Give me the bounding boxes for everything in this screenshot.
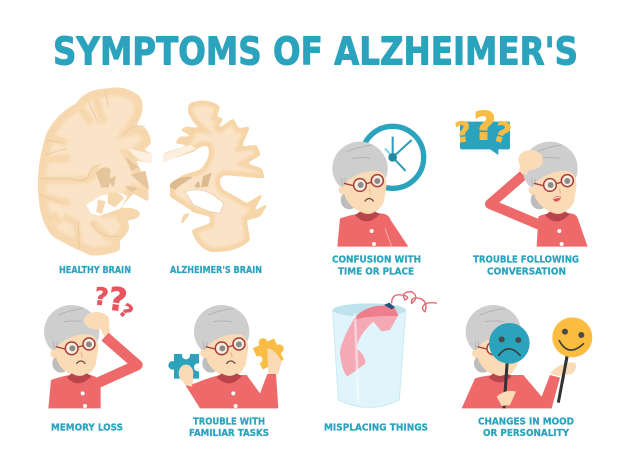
label: changes in mood or personality: OR PERSONALITY [483,428,569,439]
label: memory loss: MEMORY LOSS [51,422,123,434]
label: trouble following conversation: TROUBLE FOLLOWING [473,254,579,266]
icon: speech bubble with question marks: ? [473,104,496,149]
label: trouble with familiar tasks: FAMILIAR TASKS [189,428,269,439]
label: trouble with familiar tasks [189,416,269,439]
panel: confusion with time or place [332,126,424,278]
label: misplacing things: MISPLACING THINGS [324,422,428,434]
icon: woman touching head [490,142,588,247]
icon: sad mask [489,323,530,408]
icon: alzheimer's brain [163,100,266,252]
label: confusion with time or place: TIME OR PLACE [338,266,414,278]
label: trouble following conversation [473,254,579,278]
icon: woman with puzzle pieces [168,305,288,408]
label: changes in mood or personality [478,416,574,439]
icon: woman with question marks: ? [106,279,129,320]
panel: memory loss [44,279,137,434]
icon: speech bubble with question marks: ? [453,115,473,150]
icon: woman with question marks: ? [92,282,110,312]
icon: speech bubble with question marks: ? [489,115,515,151]
panel: changes in mood or personality [462,305,592,439]
label: confusion with time or place [332,254,421,278]
icon: phone in a glass [333,292,437,407]
panel: trouble with familiar tasks [168,305,288,439]
icon: yellow puzzle piece [248,332,288,374]
icon: clock and woman [332,126,424,247]
label: trouble with familiar tasks: TROUBLE WITH [193,416,265,428]
label: changes in mood or personality: CHANGES IN MOOD [478,416,574,428]
panel: misplacing things [324,292,437,434]
icon: teal puzzle piece [168,351,202,387]
label: trouble following conversation: CONVERSATION [487,266,566,278]
icon: speech bubble with question marks [453,104,515,155]
panel: trouble following conversation [453,104,588,277]
icon: woman with mood masks [462,305,592,408]
icon: woman with question marks: ? [115,300,136,323]
icon: woman with question marks [44,279,137,408]
panel: brains [33,83,273,276]
label: alzheimer's brain: ALZHEIMER'S BRAIN [170,265,262,276]
label: healthy brain: HEALTHY BRAIN [59,265,131,276]
icon: healthy brain [38,88,152,256]
label: confusion with time or place: CONFUSION WITH [332,254,421,266]
icon: happy mask [550,317,592,403]
